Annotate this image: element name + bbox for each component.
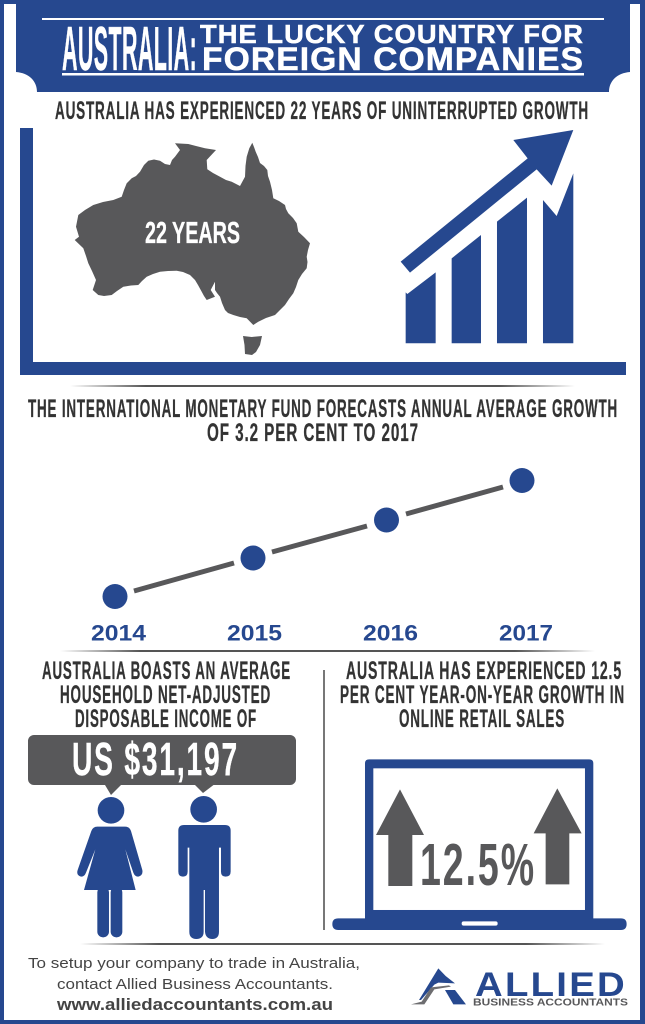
logo: Allied Business Accountants: BUSINESS ACCOUNTANTS [473, 996, 628, 1008]
heading: household income: AUSTRALIA BOASTS AN AVERAGE [42, 658, 291, 685]
year labels: 2017 [499, 620, 553, 646]
heading: online retail [340, 658, 625, 733]
year labels: 2016 [363, 620, 418, 646]
year labels: 2014 [91, 620, 147, 646]
logo: Allied Business Accountants: ALLIED [475, 966, 627, 1004]
callout: income figure: US $31,197 [72, 733, 239, 785]
icon: laptop [332, 759, 627, 930]
icon: up arrow right [534, 788, 582, 884]
line chart: growth 2014 to 2017 [91, 468, 553, 646]
heading: household income [42, 658, 291, 733]
icon: woman [77, 797, 142, 937]
year labels: 2015 [227, 620, 282, 646]
icon: man [178, 796, 231, 939]
year labels [91, 620, 553, 646]
title text: AUSTRALIA: [62, 15, 197, 84]
footer call to action: To setup your company to trade in Australia, [28, 955, 360, 972]
panel frame: growth [20, 128, 626, 375]
logo: Allied Business Accountants [411, 966, 628, 1008]
footer call to action [28, 955, 360, 1014]
map of Australia [75, 143, 310, 355]
heading: household income: HOUSEHOLD NET-ADJUSTED [60, 682, 271, 709]
title banner [0, 0, 645, 92]
title text: THE LUCKY COUNTRY FOR [200, 19, 584, 49]
icon: rising bar chart with arrow [401, 130, 573, 343]
heading: household income: DISPOSABLE INCOME OF [75, 706, 257, 733]
heading: IMF forecast: OF 3.2 PER CENT TO 2017 [207, 420, 419, 447]
callout: income figure [28, 733, 296, 795]
heading: IMF forecast [28, 396, 618, 447]
map label: 22 YEARS [145, 215, 240, 250]
icon: up arrow left [376, 789, 424, 886]
logo mark [411, 968, 466, 1004]
title text: FOREIGN COMPANIES [202, 41, 584, 77]
laptop figure: 12.5% [420, 832, 536, 898]
footer call to action: contact Allied Business Accountants. [57, 976, 333, 993]
footer call to action: www.alliedaccountants.com.au [56, 996, 333, 1014]
